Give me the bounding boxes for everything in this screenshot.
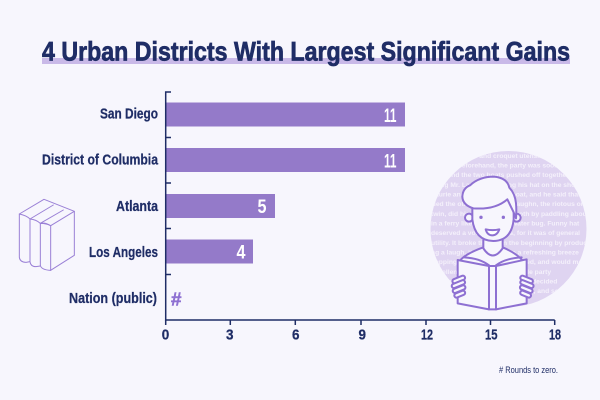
hair bbox=[462, 177, 516, 218]
axis labels: 6 bbox=[292, 328, 300, 344]
mouth bbox=[486, 229, 499, 235]
axis labels: 0 bbox=[162, 328, 169, 344]
axis labels bbox=[162, 328, 561, 344]
figure bbox=[451, 177, 534, 309]
circle of text: Ned the other, while Fred Vaughn, the riotous one bbox=[431, 201, 589, 208]
circle of text: twin, did his best to upset both by paddling about bbox=[431, 211, 590, 218]
category labels: San Diego bbox=[100, 106, 158, 122]
footnote: # Rounds to zero. bbox=[499, 365, 558, 375]
axis labels: 3 bbox=[226, 328, 234, 344]
value labels: 11 bbox=[384, 106, 397, 127]
circle of text: ed, and the two boats pushed off together bbox=[436, 172, 569, 179]
bars bbox=[166, 102, 405, 264]
circle of text: flapping to and fro as she rowed, and would make bbox=[431, 259, 590, 266]
circle of text: in a ferry like a disturbed water bug. Funny hat bbox=[431, 220, 580, 228]
circle of text: ks and croquet utensils. Before bbox=[470, 153, 570, 160]
category labels: District of Columbia bbox=[42, 152, 159, 168]
body bbox=[460, 247, 523, 280]
axis labels: 15 bbox=[485, 328, 498, 344]
book bbox=[458, 260, 489, 309]
axes bbox=[166, 92, 555, 325]
category labels bbox=[42, 106, 159, 307]
icon: books bbox=[19, 199, 74, 270]
circle of text: aving Mr. Laurence waving his hat on the shore bbox=[431, 182, 582, 189]
circle of text: utility. It broke the ice in the beginning by producing bbox=[431, 240, 597, 247]
value labels: 5 bbox=[258, 197, 267, 218]
ears bbox=[465, 214, 473, 222]
value labels: # bbox=[171, 290, 182, 310]
category labels: Nation (public) bbox=[69, 290, 157, 307]
value labels bbox=[171, 106, 397, 310]
circle of text: and so on, they said. Miss Kate decided bbox=[431, 278, 557, 286]
face bbox=[472, 198, 514, 241]
circle of text: Laurie and Jo rowed one boat, and he said that bbox=[431, 192, 581, 198]
axis labels: 18 bbox=[549, 328, 561, 344]
circle of text: that she was rather odd, manner, and so bbox=[431, 288, 559, 295]
value labels: 11 bbox=[384, 152, 397, 172]
category labels: Atlanta bbox=[116, 198, 159, 215]
bar chart bbox=[42, 92, 561, 344]
eyes bbox=[479, 216, 483, 219]
axis labels: 9 bbox=[358, 328, 366, 344]
axis labels: 12 bbox=[421, 328, 433, 344]
circle of text: nd. Beforehand, the party was soon bbox=[445, 162, 558, 170]
left hand bbox=[451, 275, 466, 298]
circle of text: ng a laugh, it created quite a refreshing breeze bbox=[431, 250, 579, 256]
illustration: reading child bbox=[430, 151, 597, 309]
circle of text: excellent umbrella for the whole party bbox=[431, 269, 551, 276]
circle of text: deserved a vote of thanks, for it was of general bbox=[431, 230, 580, 237]
right hand bbox=[519, 275, 534, 298]
circle of text bbox=[430, 151, 597, 307]
value labels: 4 bbox=[236, 242, 246, 264]
category labels: Los Angeles bbox=[89, 244, 158, 261]
